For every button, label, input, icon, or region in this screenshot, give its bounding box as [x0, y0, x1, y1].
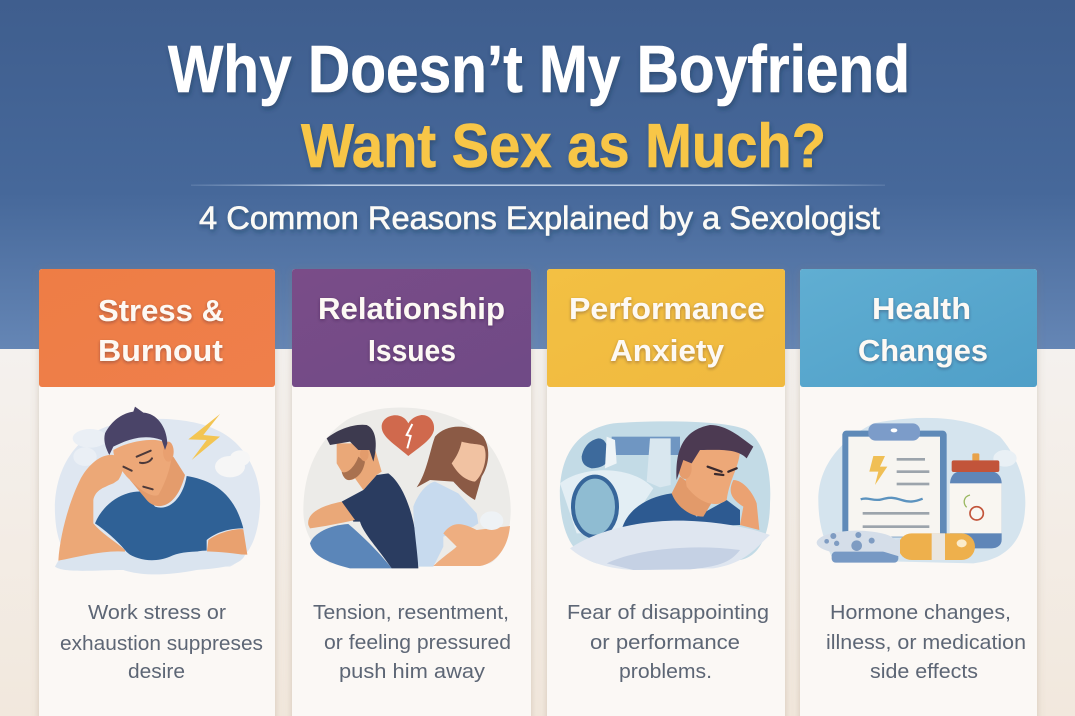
- header: relationship issues: Issues: [368, 333, 456, 368]
- panel: health changes: [800, 269, 1037, 716]
- description: relationship issues: push him away: [339, 661, 485, 683]
- title: Why Doesn’t My Boyfriend: [168, 32, 910, 107]
- illustration: couple sitting back to back with broken heart: [303, 407, 511, 568]
- description: health changes: Hormone changes,: [830, 602, 1011, 624]
- description: performance anxiety: [567, 602, 769, 683]
- description: health changes: side effects: [870, 661, 978, 683]
- description: health changes: [826, 602, 1026, 683]
- header: relationship issues: [292, 269, 531, 387]
- header: performance anxiety: Performance: [569, 291, 765, 326]
- background: blue upper band: [0, 0, 1075, 349]
- description: health changes: illness, or medication: [826, 632, 1026, 654]
- background: cream lower band: [0, 349, 1075, 716]
- description: relationship issues: Tension, resentment,: [313, 602, 509, 624]
- header: performance anxiety: Anxiety: [610, 333, 725, 368]
- panel: stress and burnout: [39, 269, 275, 716]
- title: Want Sex as Much?: [301, 112, 826, 181]
- header: stress and burnout: Stress &: [98, 293, 224, 328]
- description: stress and burnout: exhaustion suppreses: [60, 633, 263, 655]
- description: stress and burnout: desire: [128, 661, 185, 683]
- description: relationship issues: or feeling pressured: [324, 632, 511, 654]
- header: health changes: [800, 269, 1037, 387]
- description: performance anxiety: or performance: [590, 632, 740, 654]
- panel: relationship issues: [292, 269, 531, 716]
- subtitle: 4 Common Reasons Explained by a Sexologist: [199, 200, 880, 236]
- panel: performance anxiety: [547, 269, 785, 716]
- header: performance anxiety: [547, 269, 785, 387]
- description: stress and burnout: [60, 602, 263, 683]
- header: health changes: Changes: [858, 333, 988, 368]
- illustration: clipboard, medicine bottle and pills: [817, 418, 1025, 563]
- description: performance anxiety: problems.: [619, 661, 712, 683]
- header: health changes: Health: [872, 291, 971, 326]
- header: stress and burnout: [39, 269, 275, 387]
- title: [168, 32, 910, 181]
- description: stress and burnout: Work stress or: [88, 602, 226, 624]
- header: relationship issues: Relationship: [318, 291, 505, 326]
- header: stress and burnout: Burnout: [98, 333, 223, 368]
- illustration: worried man in bed: [560, 421, 770, 570]
- illustration: exhausted man with lightning bolt: [55, 407, 260, 574]
- description: relationship issues: [313, 602, 511, 683]
- description: performance anxiety: Fear of disappointing: [567, 602, 769, 624]
